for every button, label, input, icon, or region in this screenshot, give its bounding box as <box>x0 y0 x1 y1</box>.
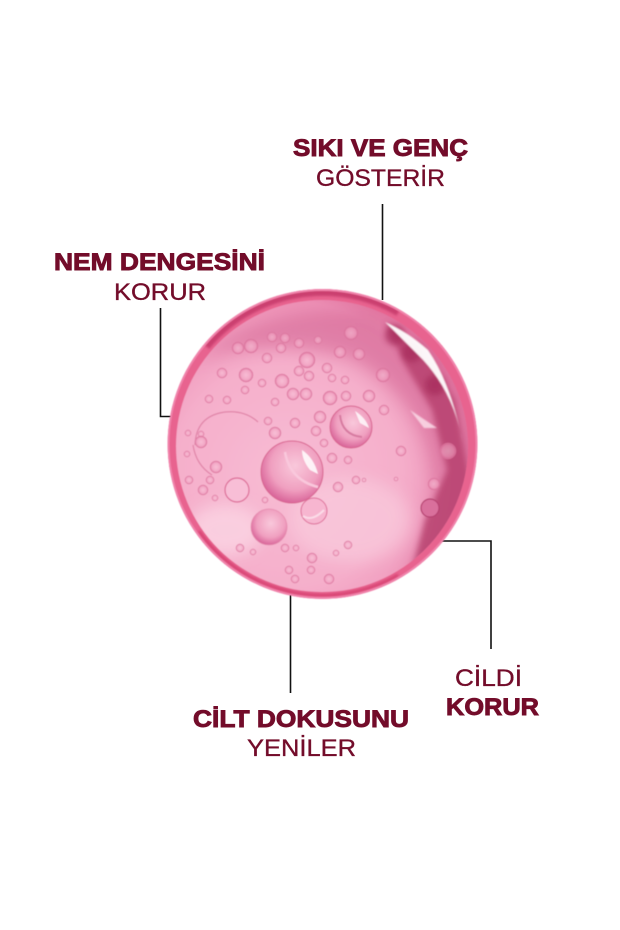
label regular line: CİLDİ <box>455 665 522 692</box>
right lower bubble <box>421 499 439 517</box>
infographic canvas <box>55 138 540 756</box>
label: bottom <box>193 706 409 762</box>
connector line: top <box>382 204 384 300</box>
label bold line: NEM DENGESİNİ <box>54 249 265 276</box>
left bubble <box>225 478 249 502</box>
large bubble outline <box>193 412 258 475</box>
droplet body <box>176 300 468 592</box>
label bold line: CİLT DOKUSUNU <box>193 706 409 733</box>
label regular line: GÖSTERİR <box>316 165 445 192</box>
label regular line: KORUR <box>114 279 206 306</box>
label: top <box>293 135 468 192</box>
small bubbles <box>184 326 456 584</box>
upper right bubble <box>330 406 372 448</box>
main bubble <box>261 441 323 503</box>
connector line: right <box>440 541 491 649</box>
highlights top right <box>385 322 459 429</box>
gel droplet <box>168 289 480 599</box>
connector line: left <box>160 308 172 416</box>
label bold line: KORUR <box>446 694 539 721</box>
shaded areas <box>192 306 468 564</box>
lower left bubble <box>251 509 287 545</box>
droplet rim <box>168 289 478 599</box>
connector line: bottom <box>290 595 292 693</box>
label: left <box>54 249 265 306</box>
label: right <box>446 665 539 721</box>
label bold line: SIKI VE GENÇ <box>293 135 468 162</box>
lower middle bubble <box>301 498 327 524</box>
label regular line: YENİLER <box>247 735 356 762</box>
